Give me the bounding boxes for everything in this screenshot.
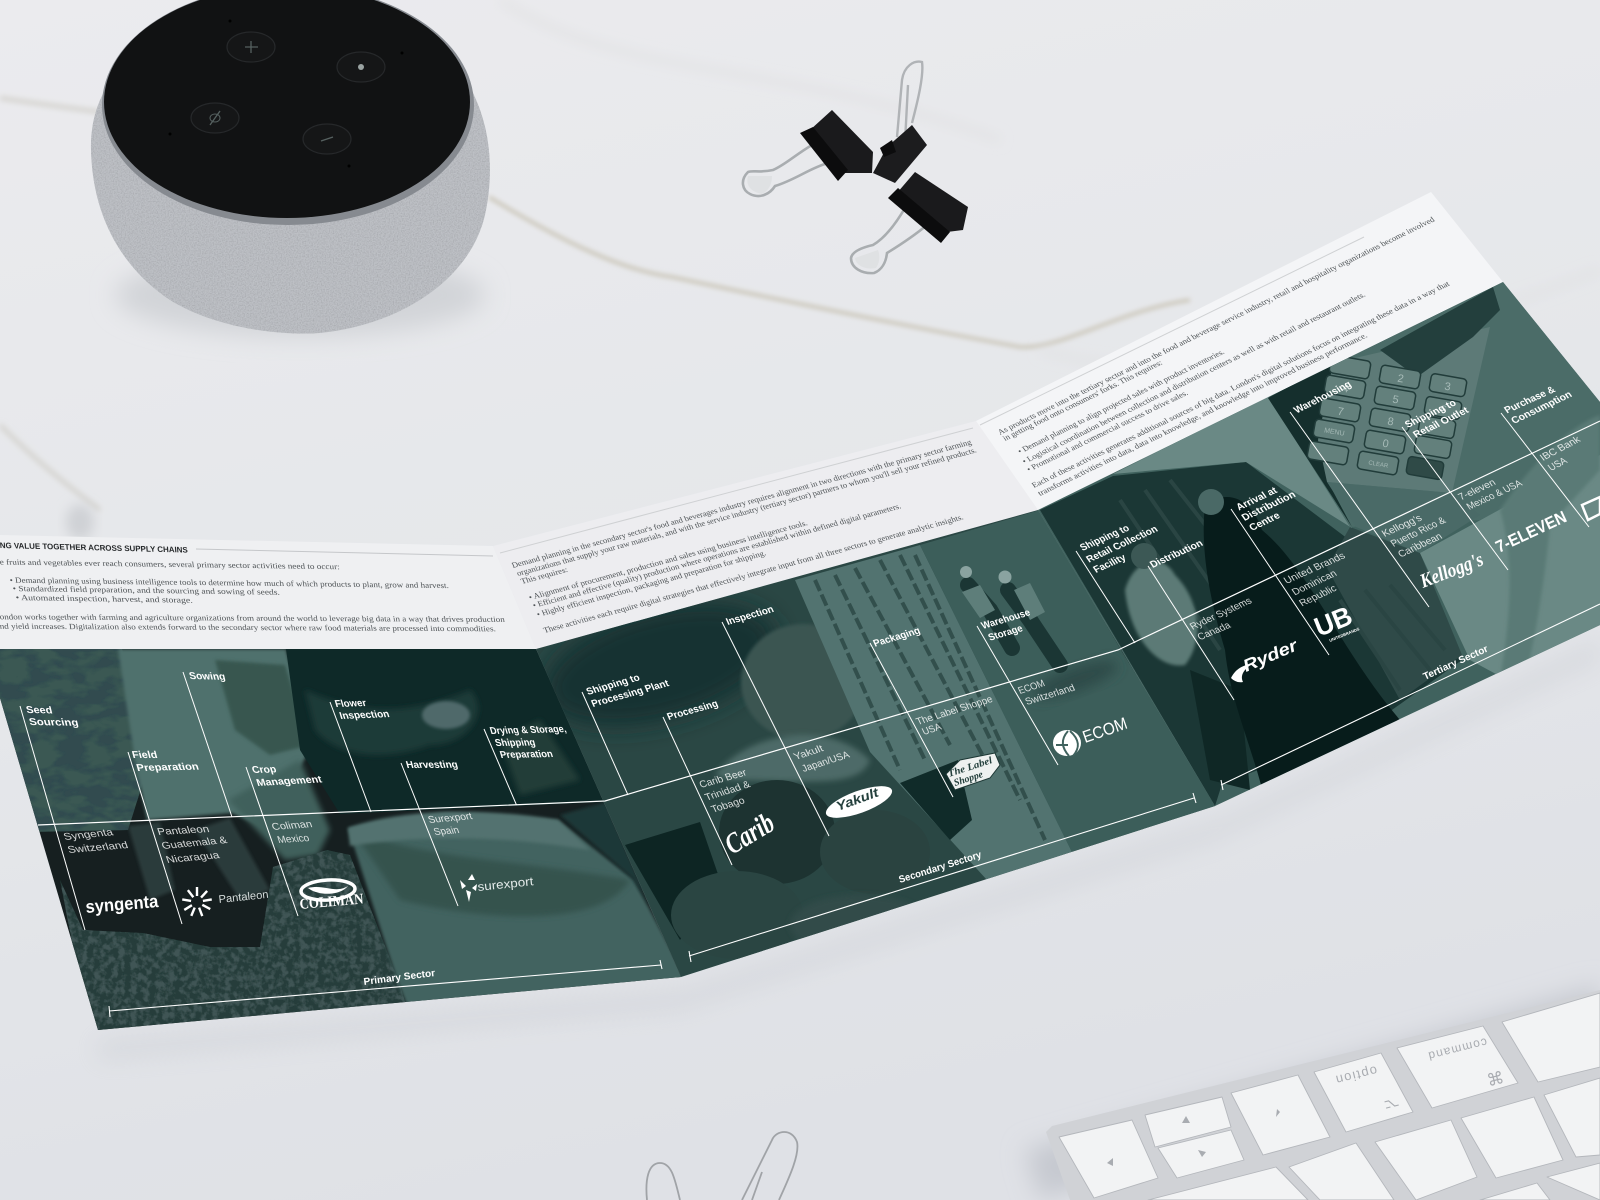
text: tertiary sector intro: Each of these activities generates additional sources of big data. London's digital solutions focus on integrating these data in a way that	[1030, 279, 1452, 490]
key legends	[1107, 1035, 1506, 1166]
step: sowing	[183, 671, 232, 817]
text: primary sector intro: • Demand planning using business intelligence tools to determine how much of which products to plant, grow and harvest.	[9, 576, 449, 590]
step: shipping to retail collection facility: Facility	[1091, 552, 1129, 576]
photo: workers	[1125, 561, 1197, 666]
step: field preparation, Pantaleon: Field	[131, 750, 159, 761]
step: shipping to retail collection facility: Retail Collection	[1084, 524, 1160, 565]
logo: Coliman	[299, 879, 364, 913]
step: inspection, Yakult: Inspection	[724, 604, 776, 628]
step: arrival at distribution centre, United Brands: Dominican	[1290, 568, 1339, 598]
steps: tertiary sector	[1076, 379, 1600, 700]
photo: sack	[348, 813, 690, 1008]
text: secondary sector intro: Demand planning in the secondary sector's food and beverages industry requires alignment in two directions with the primary sector farming	[510, 438, 973, 570]
step: processing, Carib: Carib	[719, 807, 780, 861]
sector bracket: secondary: Secondary Sectory	[898, 850, 983, 886]
sector bracket: tertiary: Tertiary Sector	[1422, 644, 1490, 683]
step: warehousing, Kellogg's: Puerto Rico &	[1389, 515, 1448, 549]
text: primary sector intro	[0, 541, 505, 633]
photo: bright wall	[1113, 396, 1352, 528]
step: warehouse storage, ECOM: Storage	[987, 623, 1025, 643]
photo: table behind terminal	[1268, 282, 1600, 527]
step: inspection, Yakult	[722, 604, 896, 836]
photo: leaf in hand	[228, 760, 330, 860]
key legends: command	[1427, 1035, 1489, 1063]
step: flower inspection	[330, 698, 391, 812]
step: distribution, Ryder: Canada	[1196, 620, 1233, 643]
logo: ECOM: ECOM	[1080, 714, 1130, 747]
logo: Ryder	[1231, 635, 1302, 682]
sector bracket: primary: Primary Sector	[363, 968, 436, 988]
keypad keys	[1307, 355, 1467, 480]
text: primary sector intro: NG VALUE TOGETHER ACROSS SUPPLY CHAINS	[0, 541, 189, 555]
panel 1 photo: primary sector	[0, 640, 700, 1040]
text: secondary sector intro: This requires:	[519, 565, 569, 586]
keypad digits: 8	[1386, 416, 1395, 428]
panel 3 photo: tertiary sector	[1030, 270, 1600, 830]
photo: shipping containers	[1040, 462, 1462, 806]
photo: foliage	[60, 850, 408, 1035]
step: purchase and consumption, IBC Bank	[1501, 385, 1600, 527]
step: warehouse storage, ECOM: Warehouse	[980, 608, 1033, 632]
text: tertiary sector intro: • Promotional and commercial success to drive sales.	[1025, 388, 1190, 474]
keypad digits: 5	[1391, 394, 1400, 406]
photo: warehouse floor and workers	[920, 510, 1218, 852]
photo: dark soil and hands	[286, 649, 606, 814]
photo: forearms	[128, 818, 270, 900]
speaker buttons	[191, 32, 385, 154]
step: warehouse storage, ECOM: ECOM	[1016, 678, 1047, 697]
step: drying and storage: Preparation	[499, 749, 554, 761]
text: primary sector intro: • Standardized field preparation, and the sourcing and sowing of seeds.	[12, 584, 280, 597]
keyboard	[1025, 985, 1600, 1200]
step: warehousing, Kellogg's: Warehousing	[1292, 379, 1354, 416]
step: field preparation, Pantaleon: Preparation	[135, 762, 200, 774]
step: processing, Carib: Tobago	[710, 795, 747, 815]
key legends: option	[1335, 1063, 1379, 1088]
logo: Coliman: COLIMAN	[299, 891, 364, 913]
step: shipping to retail outlet, 7-Eleven: 7-ELEVEN	[1493, 507, 1570, 557]
step: warehousing, Kellogg's: Kellogg's	[1416, 548, 1487, 593]
step: sowing: Sowing	[188, 671, 227, 683]
text: tertiary sector intro	[980, 215, 1452, 498]
logo: ECOM	[1053, 714, 1130, 756]
step: seed sourcing, Syngenta: Sourcing	[28, 717, 80, 729]
text: tertiary sector intro: • Demand planning to align projected sales with product inventories.	[1016, 347, 1226, 456]
step: shipping to processing plant: Processing Plant	[590, 678, 671, 710]
key legends: ⌘	[1484, 1065, 1506, 1089]
text: primary sector intro: e fruits and vegetables ever reach consumers, several primary sector activities need to occur:	[0, 558, 340, 571]
text: secondary sector intro: organizations that supply your raw materials, and with the service industry (tertiary sector) partners to whom you'll sell your refined products.	[515, 446, 978, 578]
step: purchase and consumption, IBC Bank: Purchase &	[1502, 385, 1558, 416]
step: warehousing, Kellogg's: Kellogg's	[1380, 513, 1424, 539]
logo: The Label Shoppe: The Label	[947, 755, 994, 780]
photo: blurred background	[542, 594, 780, 736]
step: packaging, The Label Shoppe	[870, 626, 1000, 797]
step: shipping to retail outlet, 7-Eleven: Shipping to	[1403, 398, 1459, 430]
step: distribution, Ryder: Distribution	[1148, 538, 1205, 571]
photo: kale leaves	[0, 649, 150, 832]
photo: tomatoes	[740, 624, 854, 736]
step: seed sourcing, Syngenta: Switzerland	[66, 840, 130, 856]
binder clips	[743, 62, 968, 273]
keypad digits: 4	[1341, 383, 1350, 395]
text: primary sector intro: nd yield increases. Digitalization also extends forward to the secondary sector where raw food materials are processed into commodities.	[0, 622, 496, 633]
step: flower inspection: Flower	[334, 698, 368, 710]
step: warehouse storage, ECOM	[977, 608, 1130, 765]
text: tertiary sector intro: As products move into the tertiary sector and into the food and beverage service industry, retail and hospitality organizations become involved	[996, 215, 1436, 437]
step: shipping to processing plant	[582, 673, 671, 795]
step: warehousing, Kellogg's	[1290, 379, 1487, 607]
paper clips	[646, 1132, 797, 1200]
keypad digits: 3	[1443, 381, 1452, 393]
keypad digits: 0	[1381, 438, 1390, 450]
photo: card terminal body	[1318, 327, 1490, 493]
text: secondary sector intro	[500, 428, 978, 635]
step: arrival at distribution centre, United Brands: Arrival at	[1234, 485, 1280, 513]
step: shipping to retail collection facility: Shipping to	[1078, 523, 1132, 554]
step: purchase and consumption, IBC Bank: Consumption	[1509, 390, 1574, 426]
keypad digits: 2	[1396, 373, 1405, 385]
step: flower inspection: Inspection	[338, 709, 391, 722]
step: field preparation, Pantaleon: Nicaragua	[165, 850, 222, 866]
step: field preparation, Pantaleon: Pantaleon	[156, 824, 211, 838]
photo: farmer	[118, 649, 312, 827]
step: distribution, Ryder	[1148, 538, 1302, 700]
sector bracket: secondary	[689, 793, 1196, 962]
step: inspection, Yakult: Yakult	[792, 743, 826, 763]
step: shipping to retail outlet, 7-Eleven: 7-eleven	[1456, 477, 1498, 503]
step: purchase and consumption, IBC Bank: IBC Bank	[1538, 434, 1584, 463]
keypad digits: CLEAR	[1368, 460, 1389, 470]
step: drying and storage: Shipping	[494, 738, 537, 749]
step: processing, Carib: Trinidad &	[703, 779, 753, 803]
step: harvesting, Surexport: Spain	[432, 825, 461, 838]
step: processing, Carib	[663, 699, 780, 865]
steps: primary sector	[20, 671, 568, 930]
text: tertiary sector intro: • Logistical coordination between collection and distribution centers as well as with retail and restaurant outlets.	[1020, 290, 1367, 466]
keys	[1059, 993, 1600, 1200]
clip A	[743, 110, 873, 196]
step: arrival at distribution centre, United Brands: Distribution	[1240, 490, 1298, 523]
clip C	[851, 172, 968, 273]
step: shipping to retail outlet, 7-Eleven	[1402, 398, 1570, 570]
step: seed sourcing, Syngenta: syngenta	[85, 891, 160, 917]
folded brochure	[0, 192, 1600, 1060]
photo: card	[1380, 287, 1500, 377]
text: tertiary sector intro: in getting food onto consumers' forks. This requires:	[1001, 358, 1164, 443]
keypad digits: MENU	[1323, 427, 1345, 438]
logo: Pantaleon	[180, 886, 269, 919]
logo: United Brands: UNITEDBRANDS	[1329, 626, 1360, 643]
step: field preparation, Pantaleon	[128, 750, 269, 924]
text: secondary sector intro: These activities each require digital strategies that effectively integrate input from all three sectors to generate analytic insights.	[542, 513, 965, 635]
logo: The Label Shoppe	[946, 753, 1000, 790]
step: purchase and consumption, IBC Bank: USA	[1546, 456, 1570, 473]
keypad digits: 6	[1439, 404, 1448, 416]
keypad digits: 7	[1336, 406, 1345, 418]
text: tertiary sector intro: transforms activities into data, data into knowledge, and knowledge into improved business performance.	[1036, 331, 1369, 498]
step: distribution, Ryder: Ryder Systems	[1188, 596, 1254, 632]
step: warehouse storage, ECOM: Switzerland	[1024, 683, 1077, 708]
keypad digits	[1323, 373, 1452, 470]
step: crop management, Coliman: Crop	[251, 765, 278, 776]
step: packaging, The Label Shoppe: USA	[920, 722, 944, 738]
step: crop management, Coliman: Coliman	[270, 819, 314, 833]
logo: The Label Shoppe: Shoppe	[953, 769, 985, 789]
step: arrival at distribution centre, United Brands: United Brands	[1282, 551, 1348, 587]
step: shipping to retail outlet, 7-Eleven: Retail Outlet	[1411, 405, 1472, 440]
step: shipping to processing plant: Shipping to	[585, 673, 642, 698]
logo: Yakult: Yakult	[834, 784, 881, 814]
step: arrival at distribution centre, United Brands: Centre	[1247, 510, 1283, 533]
step: packaging, The Label Shoppe: The Label Shoppe	[915, 694, 995, 728]
key legends: ⌥	[1382, 1094, 1401, 1112]
logo: Surexport: surexport	[477, 874, 535, 894]
logo: United Brands: UB	[1310, 601, 1356, 643]
logo: Yakult	[822, 780, 896, 824]
step: warehousing, Kellogg's: Caribbean	[1396, 531, 1445, 560]
text: secondary sector intro: • Highly efficient inspection, packaging and preparation for shipping.	[535, 548, 767, 619]
step: seed sourcing, Syngenta: Seed	[25, 705, 54, 716]
step: packaging, The Label Shoppe: Packaging	[872, 626, 922, 649]
step: crop management, Coliman: Mexico	[276, 833, 311, 846]
text: secondary sector intro: • Efficient and effective (quality) production where operations are established within defined digital parameters.	[531, 502, 902, 610]
step: inspection, Yakult: Japan/USA	[800, 750, 852, 775]
step: processing, Carib: Processing	[665, 699, 720, 723]
text: primary sector intro: ondon works together with farming and agriculture organizations from around the world to leverage big data in a way that drives production	[0, 612, 505, 624]
photo: crates	[795, 545, 1072, 880]
step: seed sourcing, Syngenta	[20, 705, 160, 930]
sector bracket: tertiary	[1221, 604, 1600, 790]
text: primary sector intro: • Automated inspection, harvest, and storage.	[15, 593, 193, 605]
speaker microphones	[168, 20, 404, 168]
panel 2 photo: secondary sector	[530, 500, 1230, 1000]
photo: table and fork	[1420, 455, 1600, 680]
logo: Ryder: Ryder	[1240, 635, 1302, 676]
step: arrival at distribution centre, United Brands	[1231, 485, 1360, 655]
steps: secondary sector	[582, 604, 1130, 865]
clip B	[873, 62, 927, 183]
step: arrival at distribution centre, United Brands: Republic	[1297, 583, 1339, 609]
step: crop management, Coliman	[246, 765, 364, 916]
step: harvesting, Surexport: Harvesting	[405, 760, 459, 771]
text: secondary sector intro: • Alignment of procurement, production and sales using business intelligence tools.	[527, 519, 809, 602]
step: drying and storage	[484, 724, 568, 805]
step: shipping to retail outlet, 7-Eleven: Mexico & USA	[1465, 478, 1525, 512]
step: shipping to retail collection facility	[1076, 523, 1160, 643]
step: processing, Carib: Carib Beer	[698, 767, 749, 791]
paper: white text band	[0, 192, 1503, 649]
step: harvesting, Surexport: Surexport	[427, 811, 474, 826]
step: seed sourcing, Syngenta: Syngenta	[62, 827, 115, 843]
logo: Pantaleon: Pantaleon	[218, 889, 269, 906]
logo: IBC	[1582, 497, 1600, 520]
horizontal process line across the panels	[38, 421, 1600, 825]
step: crop management, Coliman: Management	[255, 774, 324, 789]
sector bracket: primary	[109, 960, 662, 1017]
step: drying and storage: Drying & Storage,	[489, 724, 568, 737]
logo: Surexport	[460, 874, 535, 902]
smart speaker	[91, 0, 490, 337]
step: field preparation, Pantaleon: Guatemala &	[160, 835, 229, 852]
step: harvesting, Surexport	[401, 760, 535, 906]
